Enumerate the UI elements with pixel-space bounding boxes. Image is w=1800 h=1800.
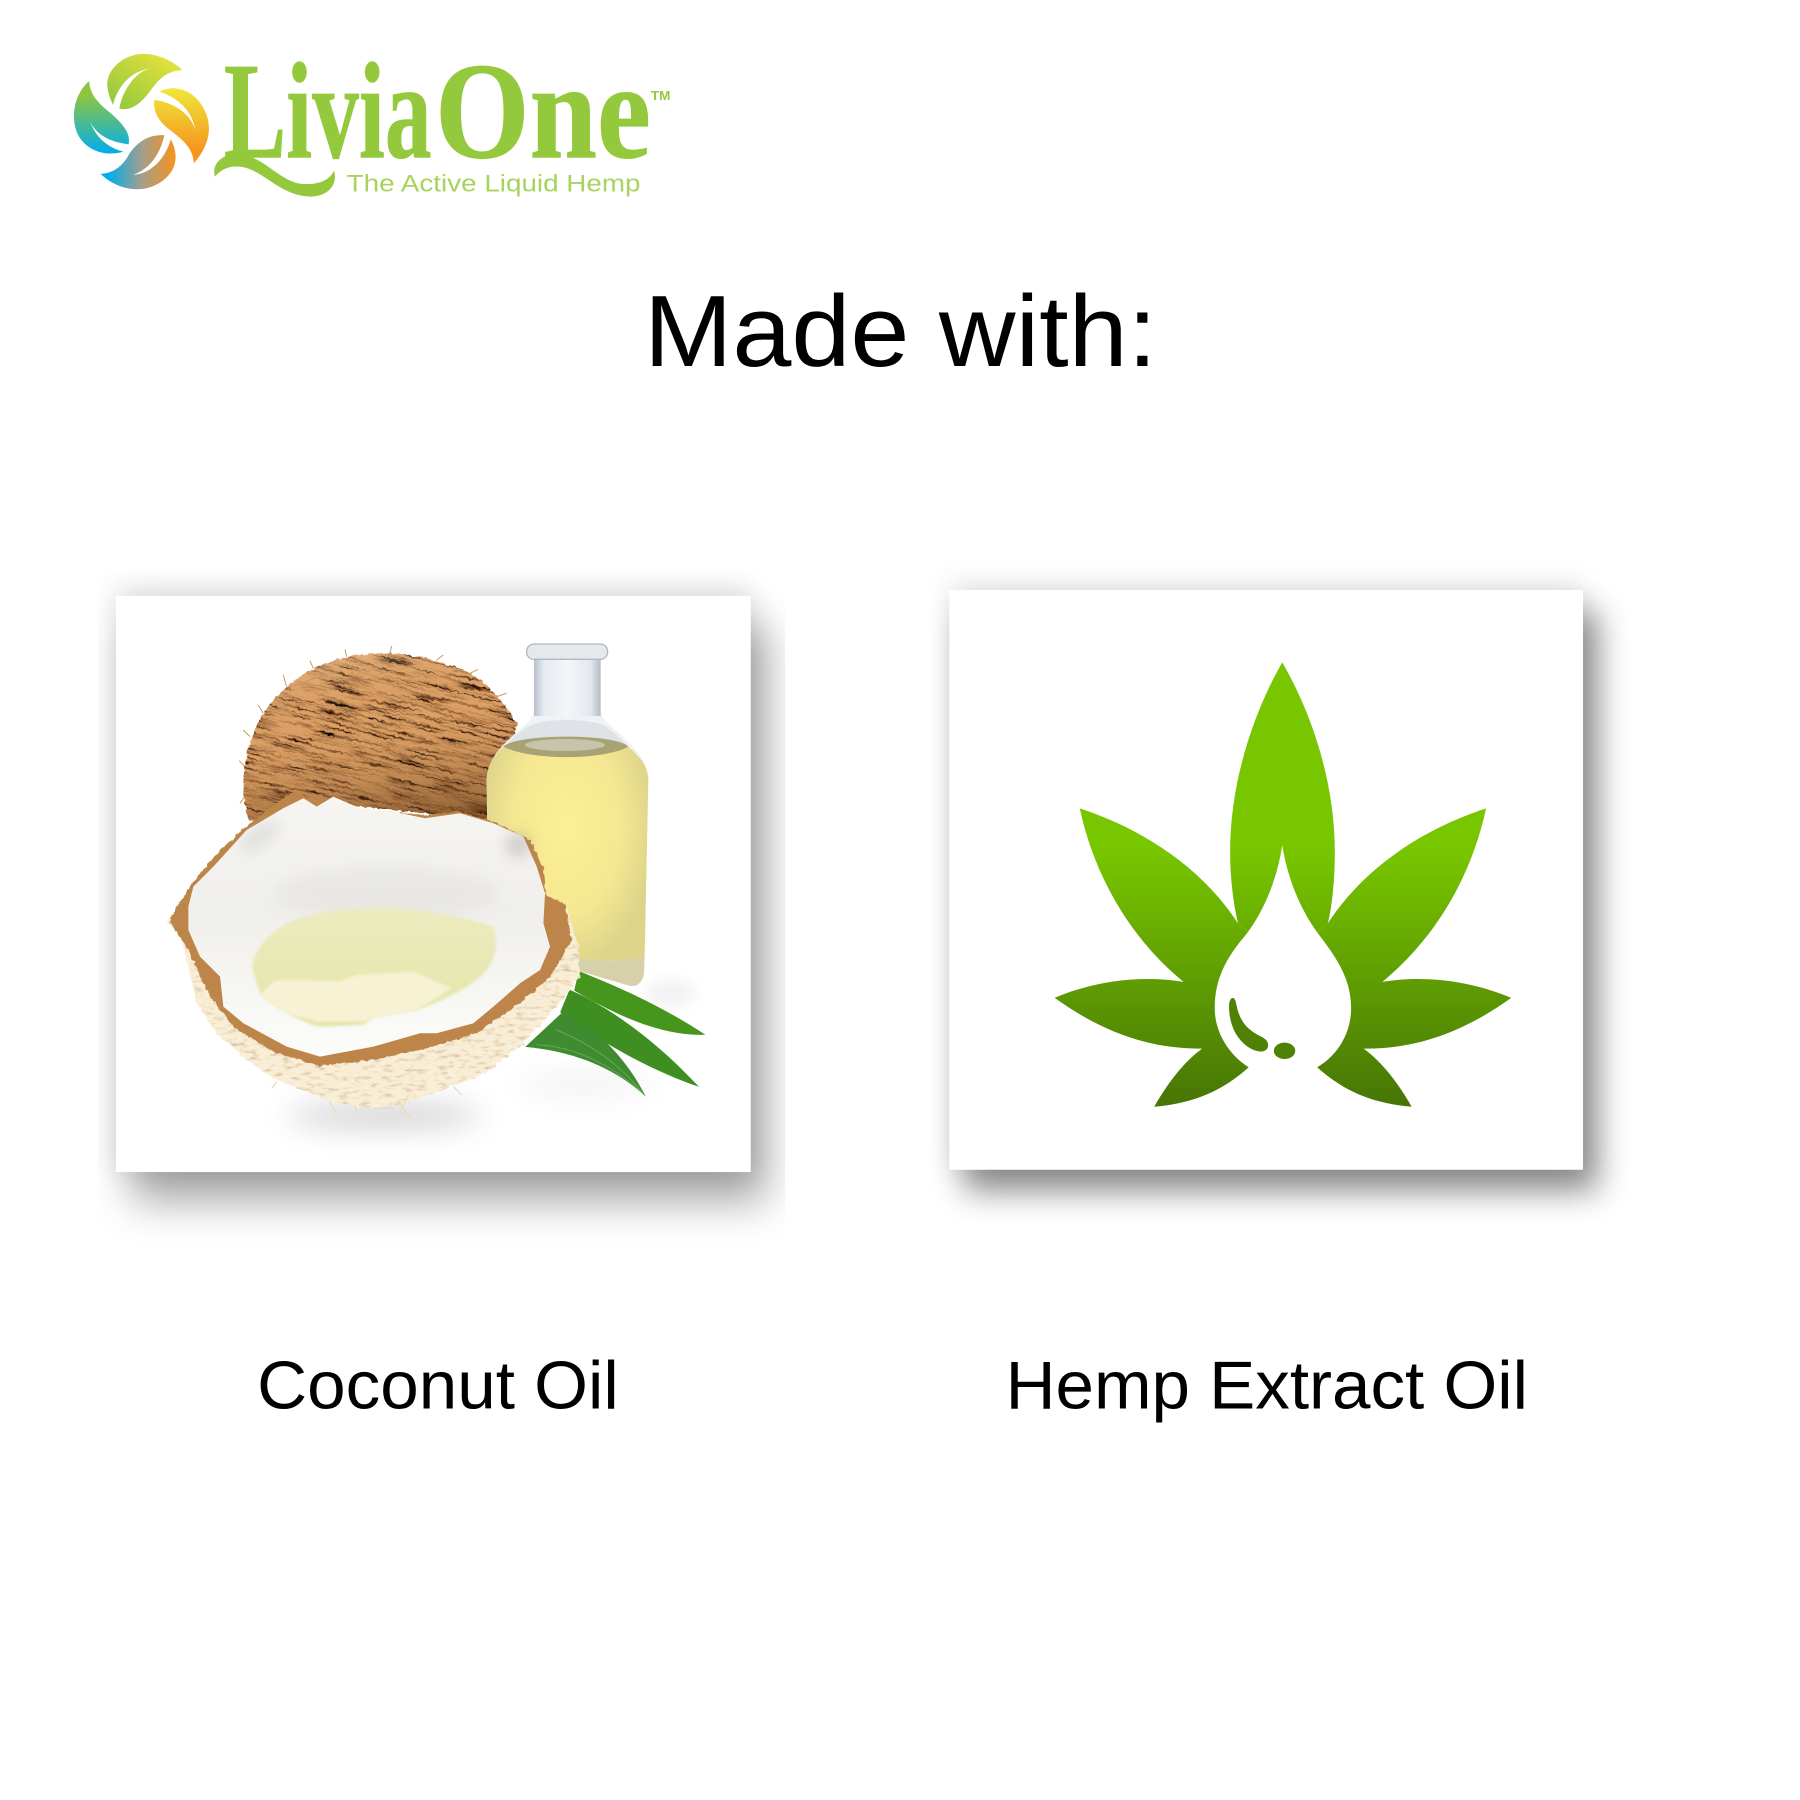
card	[949, 590, 1583, 1170]
bottle shoulder ring	[503, 720, 628, 747]
oil drop	[1215, 845, 1351, 1103]
bottle neck	[534, 659, 601, 716]
congealed oil	[260, 972, 452, 1022]
bottle rim	[527, 644, 608, 659]
logo: LiviaOne	[74, 34, 670, 198]
panel: coconut oil photo	[89, 485, 767, 1202]
oil surface glint	[525, 739, 605, 751]
hemp leaf blades	[1055, 662, 1511, 1107]
card shadow	[949, 583, 1583, 1170]
infographic canvas	[74, 54, 1620, 1422]
logo wordmark: Livia: Livia	[224, 34, 432, 187]
logo wordmark: One: One	[435, 34, 651, 187]
logo tagline: The Active Liquid Hemp	[347, 171, 641, 198]
flesh	[188, 797, 550, 1057]
label: coconut oil: Coconut Oil	[257, 1349, 619, 1424]
oil in bottle	[487, 747, 648, 960]
flesh shadow right	[506, 833, 530, 857]
ground shadow under shell	[287, 1104, 482, 1127]
husk	[167, 897, 580, 1108]
logo trademark: TM	[651, 88, 670, 103]
palm leaves	[525, 971, 705, 1097]
flesh inner shade	[273, 867, 500, 920]
coconut illustration	[166, 643, 706, 1140]
oil surface	[503, 737, 628, 757]
whole coconut	[166, 643, 706, 1109]
hemp leaf with oil drop	[1055, 662, 1511, 1107]
drop highlight	[1229, 998, 1268, 1052]
coconut shell	[167, 792, 580, 1118]
coconut loose fibers	[239, 646, 507, 803]
title: Made with:	[644, 276, 1157, 388]
bottle glass	[487, 660, 648, 986]
panel: hemp extract oil icon	[949, 583, 1598, 1192]
logo L swash	[214, 155, 335, 197]
bottle shadow on ground	[643, 980, 697, 1007]
label: hemp extract oil: Hemp Extract Oil	[1006, 1349, 1528, 1424]
leaf ground shadow	[517, 1076, 654, 1094]
husk hairs	[272, 1082, 462, 1118]
card	[116, 596, 751, 1172]
brown shell band	[169, 792, 572, 1066]
card shadow	[116, 588, 767, 1202]
flesh shadow left	[236, 817, 284, 857]
drop dot	[1274, 1043, 1295, 1059]
bottle base glass	[570, 957, 645, 986]
oil pool	[252, 908, 496, 1027]
logo icon: four leaves	[74, 54, 209, 189]
